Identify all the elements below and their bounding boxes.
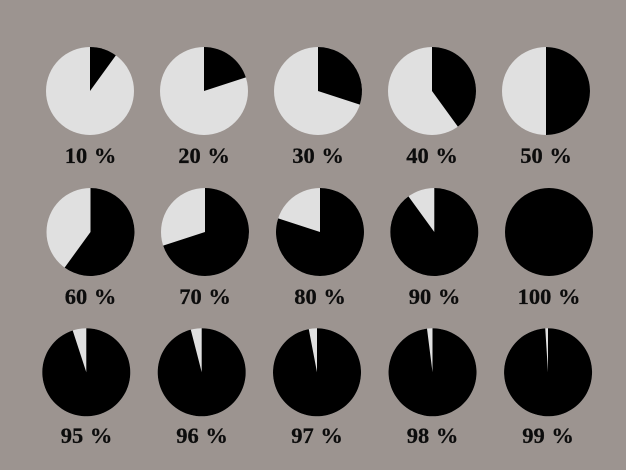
pie 70%: 70 % bbox=[179, 284, 231, 309]
pie 97% bbox=[273, 328, 361, 448]
pie 90%: 90 % bbox=[409, 284, 460, 309]
pie 20%: 20 % bbox=[178, 143, 230, 168]
pie 50% bbox=[502, 47, 590, 168]
pie 98% bbox=[388, 328, 477, 448]
pie 95% bbox=[42, 328, 130, 448]
pie 100%: 100 % bbox=[518, 284, 580, 309]
pie 80%: 80 % bbox=[294, 284, 346, 309]
pie 60%: 60 % bbox=[65, 284, 116, 309]
pie 95%: 95 % bbox=[61, 423, 112, 448]
pie 10% bbox=[46, 47, 134, 168]
pie 30% bbox=[274, 47, 362, 168]
pie 96%: 96 % bbox=[176, 423, 228, 448]
pie 80% bbox=[276, 188, 364, 309]
pie 96% bbox=[158, 328, 246, 448]
pie 97%: 97 % bbox=[291, 423, 343, 448]
pie 60% bbox=[46, 188, 134, 309]
pie 10%: 10 % bbox=[65, 143, 116, 168]
pie 99%: 99 % bbox=[522, 423, 574, 448]
pie 30%: 30 % bbox=[292, 143, 344, 168]
pie 40% bbox=[388, 47, 476, 168]
pie 70% bbox=[161, 188, 249, 309]
pie 99% bbox=[504, 328, 592, 448]
pie 90% bbox=[390, 188, 478, 309]
pie 50%: 50 % bbox=[520, 143, 572, 168]
pie 98%: 98 % bbox=[407, 423, 458, 448]
pie 100% bbox=[505, 188, 593, 309]
pie 20% bbox=[160, 47, 248, 168]
pie 40%: 40 % bbox=[406, 143, 458, 168]
